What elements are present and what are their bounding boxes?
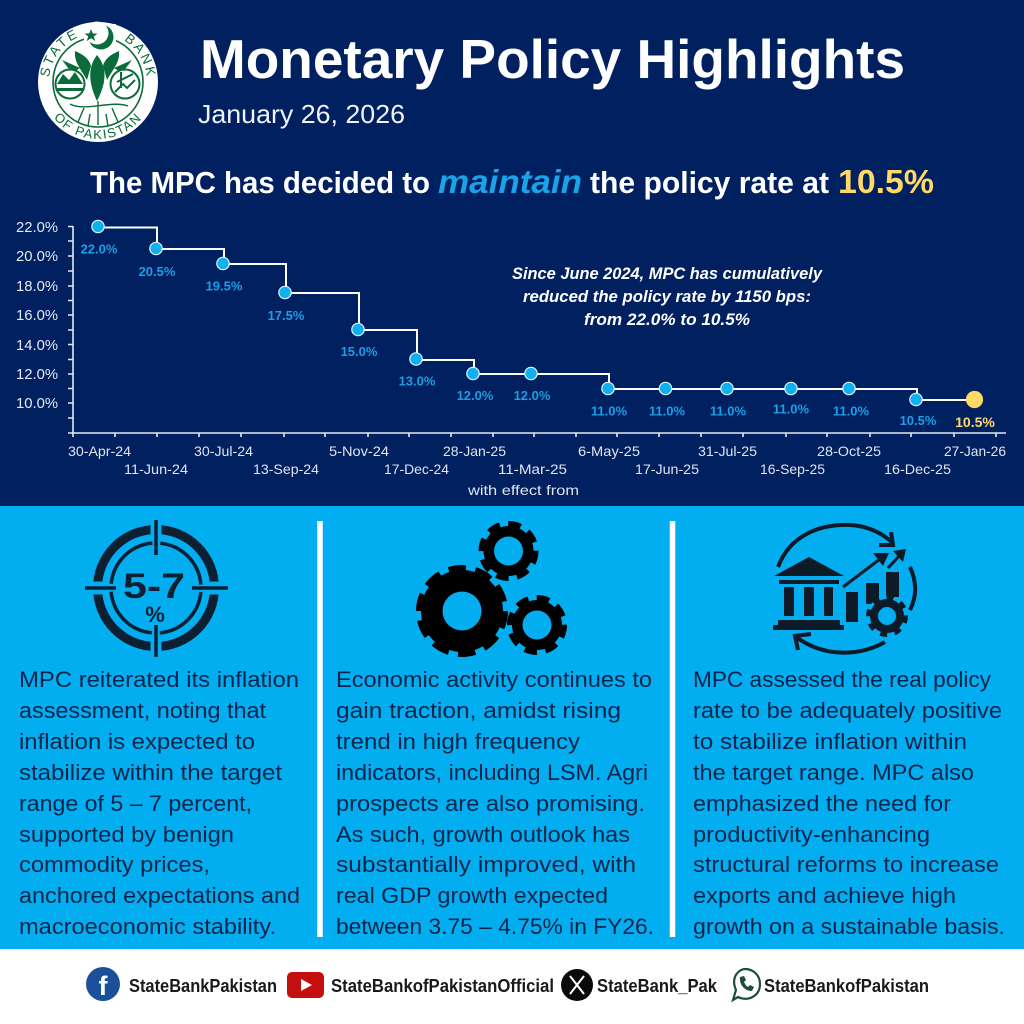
- headline: 10.5%: [838, 163, 934, 200]
- x axis: with effect from: [467, 482, 579, 498]
- inflation text: inflation is expected to: [19, 729, 255, 754]
- x axis: 5-Nov-24: [329, 443, 389, 459]
- data labels: 11.0%: [591, 404, 628, 418]
- policy rate step chart: [16, 219, 1006, 498]
- logo: State Bank of Pakistan seal: BANK: [124, 33, 156, 76]
- inflation text: commodity prices,: [19, 852, 210, 877]
- inflation text: MPC reiterated its inflation: [19, 667, 299, 692]
- icon: gears: [419, 524, 564, 654]
- y axis: 10.0%: [16, 395, 58, 412]
- logo: State Bank of Pakistan seal: STATE: [40, 30, 78, 76]
- icon: WhatsApp: [733, 969, 760, 1000]
- inflation text: stabilize within the target: [19, 760, 283, 785]
- inflation text: range of 5 – 7 percent,: [19, 791, 252, 816]
- footer panel: [0, 949, 1024, 1024]
- headline: the policy rate at: [590, 165, 829, 200]
- x axis: 31-Jul-25: [698, 443, 757, 459]
- data labels: 12.0%: [457, 388, 494, 403]
- x axis: [68, 433, 1006, 498]
- real policy rate text: rate to be adequately positive: [693, 698, 1002, 723]
- real policy rate text: productivity-enhancing: [693, 822, 930, 847]
- real policy rate text: the target range. MPC also: [693, 760, 974, 785]
- icon: bank with growth chart: [773, 525, 915, 653]
- YouTube handle: StateBankofPakistanOfficial: [331, 976, 554, 996]
- economic activity text: trend in high frequency: [336, 729, 581, 754]
- icon: inflation target 5-7%: [84, 520, 228, 657]
- y axis: 16.0%: [16, 307, 58, 324]
- economic activity text: Economic activity continues to: [336, 667, 652, 692]
- callout: cumulative reduction: Since June 2024, MPC has cumulatively: [512, 265, 823, 283]
- logo: State Bank of Pakistan seal: [38, 22, 158, 142]
- economic activity text: As such, growth outlook has: [336, 822, 630, 847]
- blue lower panel: [0, 506, 1024, 949]
- x axis: 6-May-25: [578, 443, 640, 459]
- data labels: 17.5%: [268, 308, 305, 323]
- callout: cumulative reduction: [512, 265, 823, 329]
- headline: [90, 163, 934, 200]
- icon: inflation target 5-7%: %: [145, 602, 165, 627]
- x axis: 30-Apr-24: [68, 443, 131, 459]
- x axis: 30-Jul-24: [194, 443, 253, 459]
- real policy rate text: to stabilize inflation within: [693, 729, 967, 754]
- economic activity text: between 3.75 – 4.75% in FY26.: [336, 914, 654, 939]
- header panel: [38, 22, 934, 200]
- data labels: 13.0%: [399, 374, 436, 388]
- economic activity text: real GDP growth expected: [336, 883, 608, 908]
- data labels: 10.5%: [900, 413, 937, 428]
- data labels: 11.0%: [710, 404, 747, 418]
- Facebook handle: StateBankPakistan: [129, 976, 277, 996]
- data labels: 22.0%: [81, 242, 118, 256]
- step line: [98, 228, 975, 400]
- economic activity text: substantially improved, with: [336, 852, 636, 877]
- inflation text: assessment, noting that: [19, 698, 267, 723]
- logo: State Bank of Pakistan seal: OF PAKISTAN: [55, 114, 141, 139]
- column dividers: [320, 521, 672, 937]
- y axis: 18.0%: [16, 278, 58, 295]
- data labels: 10.5%: [955, 414, 995, 430]
- panel: inflation: [19, 520, 300, 939]
- real policy rate text: emphasized the need for: [693, 791, 952, 816]
- data points: [92, 220, 983, 408]
- y axis: [16, 219, 73, 433]
- economic activity text: indicators, including LSM. Agri: [336, 760, 648, 785]
- x axis: 13-Sep-24: [253, 461, 319, 477]
- date: January 26, 2026: [198, 99, 405, 129]
- icon: Facebook: f: [98, 971, 108, 1001]
- x axis: 27-Jan-26: [944, 443, 1006, 459]
- real policy rate text: [693, 667, 1005, 939]
- data labels: 12.0%: [514, 388, 551, 403]
- y axis: 20.0%: [16, 248, 58, 265]
- icon: X: [561, 969, 593, 1001]
- panel: real policy rate: [693, 525, 1005, 939]
- icon: inflation target 5-7%: 5-7: [123, 567, 185, 606]
- economic activity text: [336, 667, 654, 939]
- data labels: 19.5%: [206, 278, 243, 294]
- WhatsApp handle: StateBankofPakistan: [764, 976, 929, 996]
- real policy rate text: growth on a sustainable basis.: [693, 914, 1005, 939]
- headline: The MPC has decided to: [90, 165, 430, 200]
- panel: economic activity: [336, 524, 654, 939]
- inflation text: supported by benign: [19, 822, 234, 847]
- x axis: 16-Sep-25: [760, 461, 825, 477]
- icon: Facebook: [86, 967, 120, 1001]
- icon: YouTube: [287, 972, 324, 998]
- x axis: 17-Dec-24: [384, 461, 449, 477]
- x axis: 28-Oct-25: [817, 443, 881, 459]
- y axis: 12.0%: [16, 366, 58, 383]
- data labels: 15.0%: [341, 344, 378, 359]
- data labels: 20.5%: [139, 264, 176, 279]
- title: Monetary Policy Highlights: [200, 28, 905, 90]
- x axis: 17-Jun-25: [635, 461, 699, 477]
- x axis: 28-Jan-25: [443, 443, 506, 459]
- callout: cumulative reduction: from 22.0% to 10.5%: [584, 311, 750, 329]
- inflation text: anchored expectations and: [19, 883, 300, 908]
- data labels: 11.0%: [649, 404, 686, 418]
- x axis: 11-Jun-24: [124, 461, 188, 477]
- real policy rate text: MPC assessed the real policy: [693, 667, 992, 692]
- y axis: 14.0%: [16, 337, 58, 354]
- X handle: StateBank_Pak: [597, 976, 718, 996]
- data labels: 11.0%: [773, 402, 810, 416]
- real policy rate text: structural reforms to increase: [693, 852, 999, 877]
- headline: maintain: [438, 163, 582, 200]
- inflation text: [19, 667, 300, 939]
- callout: cumulative reduction: reduced the policy rate by 1150 bps:: [523, 288, 811, 306]
- inflation text: macroeconomic stability.: [19, 914, 276, 939]
- data labels: [81, 242, 995, 430]
- data labels: 11.0%: [833, 404, 870, 418]
- economic activity text: gain traction, amidst rising: [336, 698, 621, 723]
- economic activity text: prospects are also promising.: [336, 791, 645, 816]
- x axis: 16-Dec-25: [884, 461, 951, 477]
- y axis: 22.0%: [16, 219, 58, 236]
- x axis: 11-Mar-25: [498, 461, 567, 477]
- real policy rate text: exports and achieve high: [693, 883, 956, 908]
